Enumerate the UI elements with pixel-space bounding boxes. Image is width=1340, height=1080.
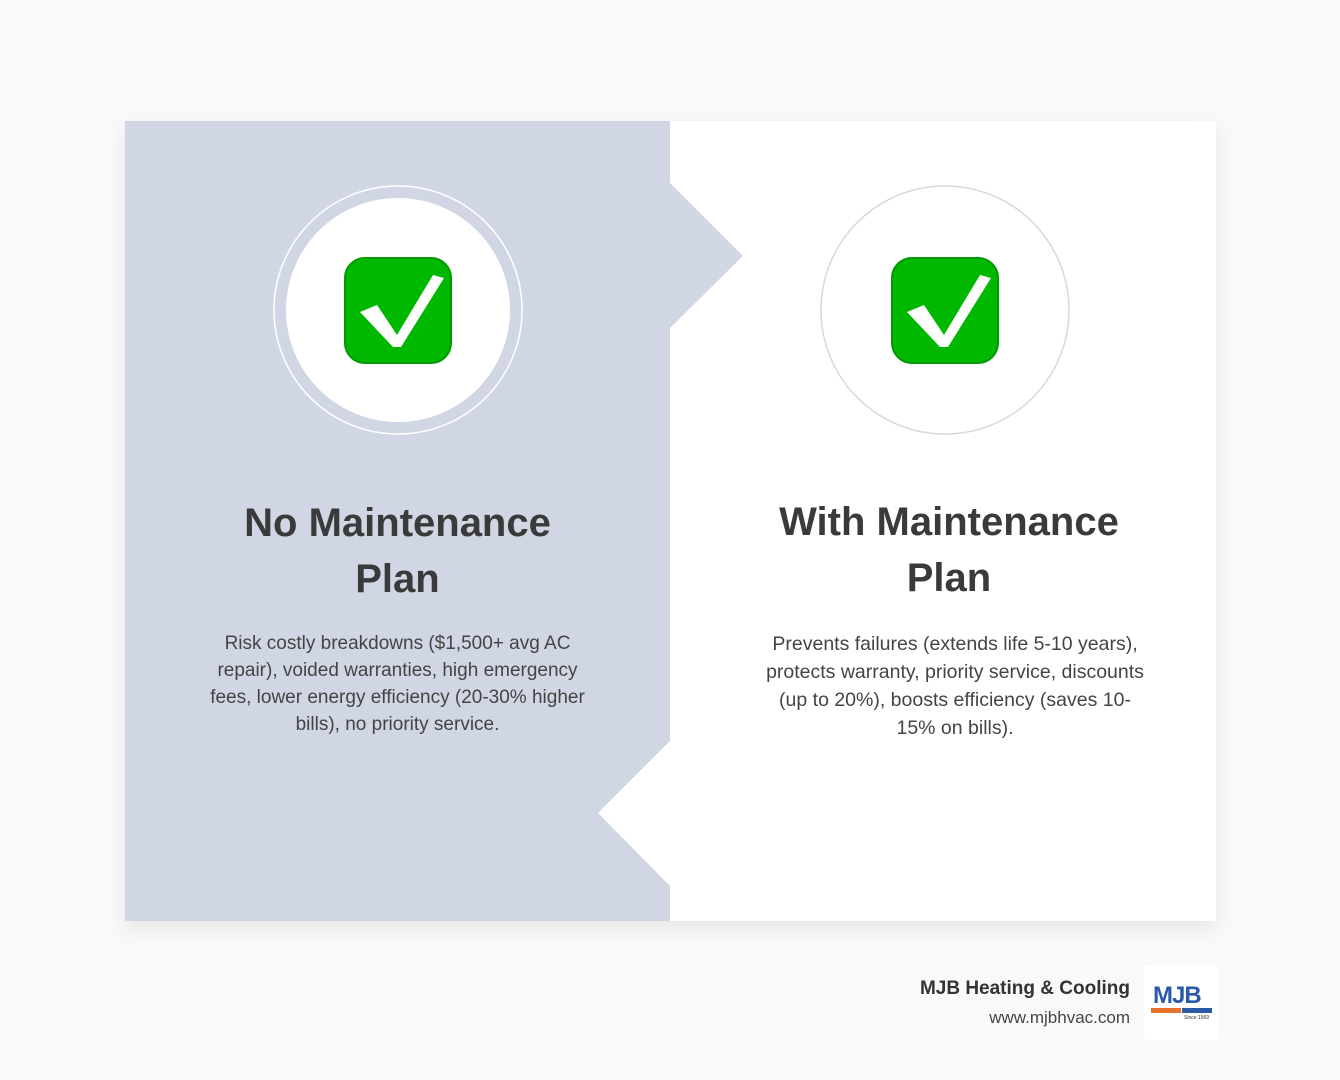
heading: no maintenance: No Maintenance [244,501,551,545]
text: with maintenance: Prevents failures (extends life 5-10 years), [772,633,1138,655]
heading: no maintenance [244,501,551,601]
footer: company: MJB Heating & Cooling [920,978,1130,999]
text: no maintenance: bills), no priority service. [296,714,499,735]
text: no maintenance: fees, lower energy efficiency (20-30% higher [210,687,585,708]
text: with maintenance [766,633,1144,739]
heading: no maintenance: Plan [355,557,440,601]
heading: with maintenance: With Maintenance [779,500,1119,544]
icon: logo: Since 1969 [1184,1015,1209,1021]
heading: with maintenance [779,500,1119,600]
card [125,121,1216,921]
footer: company: www.mjbhvac.com [989,1008,1130,1027]
icon: left check circle [273,185,523,435]
panel: left background with arrows [125,121,743,921]
heading: with maintenance: Plan [907,556,991,600]
icon: right check circle [820,185,1070,435]
text: with maintenance: (up to 20%), boosts efficiency (saves 10- [779,689,1131,711]
text: no maintenance: Risk costly breakdowns ($1,500+ avg AC [225,633,570,654]
icon: logo [1144,965,1219,1040]
text: no maintenance [210,633,585,735]
text: no maintenance: repair), voided warranties, high emergency [217,660,578,681]
text: with maintenance: protects warranty, priority service, discounts [766,661,1144,683]
footer: company [920,978,1130,1027]
icon: logo: MJB [1153,982,1201,1009]
text: with maintenance: 15% on bills). [896,717,1014,739]
